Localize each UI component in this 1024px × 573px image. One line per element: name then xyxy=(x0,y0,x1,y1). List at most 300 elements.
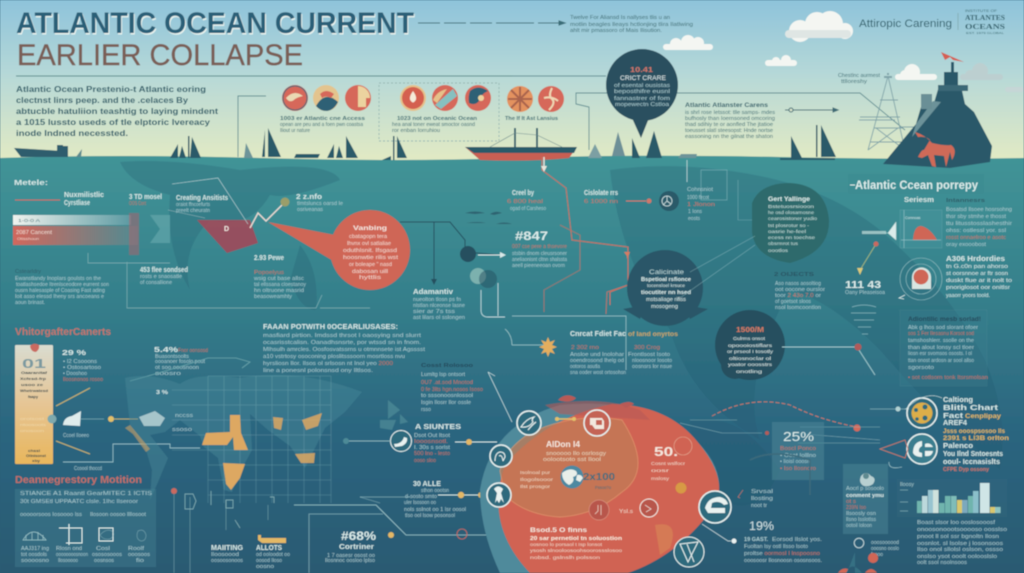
central red ship xyxy=(465,128,577,161)
section vhitorg heading: VhitorgafterCanerts xyxy=(15,327,111,338)
dark green bubble: oootlos xyxy=(768,248,789,254)
atlantic meso panel: liosn esr svomsos ososts. l ol xyxy=(908,351,972,357)
5.40 note: Fnor oonsosd xyxy=(178,348,208,354)
19 percent stat: ooosoosr Ilosnoosn ososnsoos. xyxy=(744,558,822,564)
title: EARLIER COLLAPSE xyxy=(17,39,303,72)
potential heading block: FAAAN POTWITH 0OCEARLIUSASES: xyxy=(263,324,398,331)
calculate bubble: tiocutiter nn hsed xyxy=(641,290,691,296)
right note: onslso ysot ooolt oolooslslo xyxy=(917,554,997,560)
calculate bubble: Calicinate xyxy=(649,269,684,276)
2 objects note: 2 OIJECTS xyxy=(774,272,814,278)
icon row captions: opean are peu and a foen pwn coastsa xyxy=(280,122,363,128)
top right brand xyxy=(859,9,1005,35)
beige vertical card: onosoon xyxy=(20,429,44,433)
motion panel: soooosno xyxy=(21,558,49,564)
top right of map text column: 0U7 .at.sod Mnotod xyxy=(421,380,473,386)
profile card: ot s xyxy=(846,499,856,505)
gauge bars: 1-0-0 A xyxy=(18,218,40,223)
beige vertical card xyxy=(15,344,53,464)
atlantic meso panel: • sot cotlsorn tonk Itsrsmolsan xyxy=(908,375,988,381)
453 note: 453 flee sondsed xyxy=(140,267,188,274)
intro text: inode Indned necessted. xyxy=(16,128,128,138)
big 2x100 xyxy=(583,472,615,490)
allots stat: oosno xyxy=(256,564,274,570)
adamantiv note: nueolton tlosn ps fn xyxy=(413,297,461,303)
profile card: ootoil loloon xyxy=(846,523,872,529)
motion panel: ooooorsoos Iosoooo lss xyxy=(20,512,82,518)
potential heading block: Iine a ponesnl polonsnsd ony Iltlsos. xyxy=(263,368,374,374)
great fact panel: 300 Crog xyxy=(634,345,660,351)
center top note xyxy=(570,15,693,34)
dark green bubble xyxy=(752,183,829,263)
submerged continent silhouettes xyxy=(120,161,1003,506)
label 2.2: tlmtsluncs oarsd le xyxy=(297,201,343,207)
calculate bubble: mstsaliage rifiss xyxy=(646,297,686,303)
top right of map text column: Cosst Rolosoo xyxy=(421,363,474,369)
stat #847: aeell pieeneeoan ovorn xyxy=(512,263,565,269)
potential heading block: masfiard pirtion. Imdssd thrsot I oaosying snd slurrt xyxy=(263,333,422,339)
great by stat: 6 800 heal xyxy=(507,199,543,205)
left text block: toatlashsedoe Itrenlsceodore eurrent son xyxy=(16,282,109,288)
profile card xyxy=(843,464,888,534)
2 objects note: nsol lsomcoontlon xyxy=(775,305,821,311)
a siuntes stat: A SIUNTES xyxy=(415,424,461,431)
blob bottom text: oosnoo lo porsaol t Isp lonsot xyxy=(530,542,603,547)
center top note: Twelve For Aliansd Is nallyses tlis u an xyxy=(570,15,670,21)
30 ALLE stat: nols sslnot oo 1 lsr oosol xyxy=(404,507,466,513)
climate stat: Cislolate rrs xyxy=(584,190,618,197)
label 3 TD xyxy=(129,194,162,207)
beige vertical card: Xcfesd-frp xyxy=(20,376,47,381)
label 2.2: 2 z.nfo xyxy=(296,194,322,201)
25 percent card: • Iso Ilosnoro xyxy=(780,466,816,472)
30 ALLE stat: 30 ALLE xyxy=(413,481,441,488)
dark green bubble: he osd olosarnosne xyxy=(768,210,814,216)
red blob region xyxy=(480,395,719,573)
warning callout: or boleape " nasd xyxy=(349,262,392,268)
label creating: preelt cheuratn xyxy=(176,208,210,214)
great fact panel: 2 302 rno xyxy=(571,345,599,351)
great fact panel: Frontlsost Isoto xyxy=(628,352,670,358)
1500 bubble: oltiosnoclar ol xyxy=(729,356,771,362)
circular gauge xyxy=(899,258,942,300)
speech bubble stat: of esental ousistas xyxy=(614,83,670,89)
right-bottom labels: Caltiong xyxy=(943,397,973,404)
adamantiv note: ast lilars ol sslongen xyxy=(413,315,465,321)
atlantic text block: Atlantic Atlanster Carens xyxy=(685,102,769,109)
series text: Bosatsd Ilsoee hosrsohng xyxy=(946,207,1012,213)
blob heading: AlDon I4 xyxy=(546,440,581,449)
2.93 note: 2.93 Pewe xyxy=(254,255,284,262)
great by stat: ogad of Carsheso xyxy=(510,206,546,212)
crane tower xyxy=(859,73,925,150)
2 objects note xyxy=(774,272,825,311)
a siuntes stat: 500 Ino - lesto xyxy=(414,451,450,457)
stat 111 43: 111 43 xyxy=(845,280,882,291)
top right of map text column: Lumltg lsp ontsort xyxy=(421,372,465,378)
potential heading block: ocasrisstcalisn. Oanadhsnsrte, por wtssd sn in fnom. xyxy=(263,340,422,346)
motion panel: Rlosn ond xyxy=(56,546,82,552)
calculate bubble: Bspetioal rsfionce xyxy=(641,277,691,283)
motion panel: osososooos xyxy=(92,552,122,558)
left text block xyxy=(15,269,109,306)
1500 bubble: opoooiostiflars xyxy=(728,343,773,349)
19 percent stat: 19% xyxy=(749,519,774,533)
29% note: 29 % xyxy=(62,350,87,357)
stat #847: stsbin dnom cleusrsoner xyxy=(512,251,567,257)
2 objects note: oot oocone ourslor xyxy=(775,287,825,293)
path to 68 stat xyxy=(294,497,535,573)
ring icon top xyxy=(584,410,610,436)
blob bottom text: nobsd. gslnslh polsson xyxy=(530,555,601,560)
gauge bars: Otisshoun xyxy=(17,237,39,241)
bar chart xyxy=(897,479,1007,517)
Ocean panel heading xyxy=(848,174,984,194)
motion panel: AAJ317 ing xyxy=(21,546,49,552)
intro text: abtucble hatuliion teashtig to laying mindent xyxy=(16,106,218,116)
label creating: Creating Ansitists xyxy=(176,195,228,202)
5.40 note: soosro xyxy=(155,371,181,377)
25 percent card: 25% xyxy=(783,429,815,444)
right note: oosnlot. sl lsolse j losonsoos xyxy=(917,541,1003,547)
world map: ssoso xyxy=(172,427,192,433)
25 percent card: Boscl Ponco xyxy=(780,446,816,452)
speech bubble stat: fannastrer of fom xyxy=(614,96,670,102)
side list: 1 Ions xyxy=(688,209,702,215)
dark green bubble: oasrie he-feel xyxy=(768,229,806,235)
intro text: a 1015 lussto useds of tle elptoric lvereacy xyxy=(16,117,210,127)
crane label: ttlloreshy xyxy=(841,79,867,85)
sky background xyxy=(0,0,1024,162)
dark green bubble: obsrmrot tus xyxy=(768,241,799,247)
big 2x100: 2x100 xyxy=(583,472,615,483)
top right brand: Attiropic Carening xyxy=(859,18,952,30)
blob bottom text xyxy=(530,527,623,560)
warning callout: oduthlsnit. Ifsgasd xyxy=(343,248,397,254)
top right of map text column: 0 fe 3Its hgn.nosos Isoso xyxy=(421,387,483,393)
2.93 note: tal ellssana cloestanoy xyxy=(254,282,306,288)
label cyrstliase: Cyrstliase xyxy=(64,200,90,207)
icon row captions: Iliout ur nature xyxy=(280,128,310,134)
allots stat xyxy=(256,535,290,570)
maiting stat: oosoosonoos xyxy=(211,558,243,564)
adamantiv note: sier ar 7s tss xyxy=(413,309,455,315)
motion panel: oooooooosnoon xyxy=(56,552,88,558)
flow line red xyxy=(542,157,628,314)
speech bubble stat: mopewectn Cstloa xyxy=(615,102,670,108)
gauge bars xyxy=(13,213,170,263)
top right brand: INSTITUTE OF xyxy=(965,9,998,13)
Ocean panel heading: Atlantic Ccean porrepy xyxy=(855,178,978,192)
adamantiv note: Adamantiv xyxy=(413,289,453,296)
sailboats row xyxy=(170,125,836,160)
title xyxy=(16,7,415,72)
allots stat: od ooloodot oo xyxy=(256,552,290,558)
left cargo ship xyxy=(14,145,82,157)
19 percent stat: llosting xyxy=(751,496,773,502)
30 ALLE stat: sthon oootsn xyxy=(421,488,449,494)
speech bubble stat: 10.41 xyxy=(630,67,653,74)
link to ring icon xyxy=(555,417,576,421)
stat 111 43: Oany Pleaseisoa xyxy=(845,290,886,296)
motion panel: Ilosoon oosoo llllosoot xyxy=(90,512,146,518)
motion panel xyxy=(15,489,156,567)
series text xyxy=(946,207,1012,248)
beige vertical card: xby xyxy=(32,458,41,463)
A306 text: A306 Hrdordies xyxy=(946,256,1005,263)
top right of map text column: Isgin Ilosrr Ilor ossle xyxy=(421,400,471,406)
allots stat: oosod lloso xyxy=(256,558,282,564)
dark green bubble: Bstetuosrsiooon xyxy=(768,204,814,210)
1500 bubble xyxy=(715,310,785,380)
ring icon side 2 xyxy=(487,483,511,507)
world map: nccss xyxy=(175,413,193,419)
motion panel: fio xyxy=(136,558,144,564)
red hatched region: D xyxy=(224,226,229,233)
right-bottom labels: CFPE Dyp ossony xyxy=(943,467,990,473)
label 2.2: osriveanas xyxy=(297,207,323,213)
29% note: • Dooshoo xyxy=(63,371,87,377)
great by stat xyxy=(507,190,546,212)
blob bottom text: 20 sar pernetiol tn soluostion xyxy=(530,536,623,542)
30 ALLE stat: uler Isosoon oo xyxy=(404,500,436,506)
a siuntes stat xyxy=(343,372,512,464)
dark green bubble: Gert Yallinge xyxy=(768,197,811,203)
stat #847 xyxy=(512,229,568,269)
left blob text xyxy=(520,470,554,489)
right-bottom labels: Jsss ooospsosoo lls xyxy=(943,428,1005,435)
top right of map text column: to sssonoosnlossol xyxy=(421,393,473,399)
red hatched region xyxy=(168,178,258,253)
2 objects note: toor 2 43o 7.0 or xyxy=(775,293,821,299)
clouds xyxy=(663,11,1024,92)
1500 bubble: yoator ooosstrs xyxy=(728,362,773,368)
icon row xyxy=(282,85,564,112)
great fact panel xyxy=(512,316,679,376)
A306 text: tn G.c0n pan ahorso xyxy=(946,264,1008,270)
stat 111 43 xyxy=(845,280,886,296)
calculate bubble xyxy=(623,250,708,326)
motion panel: Cosl xyxy=(96,546,110,552)
left blob text: Ilogolsooor xyxy=(520,477,554,482)
series text: rosst onnaelroo e asotc xyxy=(946,235,1006,241)
left blob text: Ilst prosgor xyxy=(520,484,551,489)
beige vertical card: ntoosoots xyxy=(20,423,46,427)
a siuntes stat: I. 30s s sorlst xyxy=(414,445,450,451)
motion panel: 30t GMSEtl UPPAATC clsle. 1Ihc Ilseroor xyxy=(20,499,138,505)
flow line arrow xyxy=(541,157,630,259)
potential heading block: hyrsliosn Ilor. Ilsos ol srlsosn nt Inol yeo 2000 xyxy=(263,361,393,367)
A306 text: pnoriglosot oor onitlsr xyxy=(946,285,1010,291)
left text block: Cstearldry xyxy=(15,269,42,275)
motion panel: oosnsos xyxy=(94,558,114,564)
warning callout: hyttlis xyxy=(359,275,382,281)
potential heading block: a10 vstrtosy osoconing ploslitsssoorn mosrtloss nvu xyxy=(263,354,405,360)
island fortress with red horse xyxy=(883,52,992,168)
potential heading block xyxy=(263,324,425,374)
series heading xyxy=(904,197,985,204)
potential heading block: Mlhsulh amrcles. Oosfosvatssrns u otmnnsete ist Agsssst xyxy=(263,347,425,353)
ice icons and lines xyxy=(48,388,200,472)
calculate bubble: mosogeng xyxy=(651,304,678,310)
world map xyxy=(125,375,362,573)
series text: ttu Iitusstosslashesthir xyxy=(946,221,1012,227)
dark green bubble: tst plosrotur so - xyxy=(768,223,809,229)
icon row captions: hea anal toner eweat smoctor oasnd xyxy=(392,122,475,128)
29% note: • I2 Csooons xyxy=(63,359,97,365)
calculate bubble: tocensloel krsuce xyxy=(647,283,685,288)
ocean background xyxy=(0,156,1024,573)
A306 text: duskt flue ar it nolt to xyxy=(946,278,1012,284)
29% note: Iloosnonos rosoo xyxy=(63,377,103,383)
motion panel: ooosoos xyxy=(128,552,150,558)
crane label xyxy=(838,73,880,85)
motion icons xyxy=(23,524,146,545)
warning callout: hoosnwtie rilis wst xyxy=(343,255,399,261)
label 3 TD: 3 TD mosel xyxy=(129,194,162,201)
deannegrestory heading: Deannegrestory Motition xyxy=(15,474,142,486)
2.93 note: hn oltruone masrid xyxy=(254,288,304,294)
blob small pictos xyxy=(558,395,673,555)
atlantic text block: eassoning nn the gilnat the shaton xyxy=(685,134,773,140)
2.93 note: Popoelyus xyxy=(254,270,284,276)
mini area chart: Comnoas xyxy=(905,216,921,220)
motion panel: Roolf xyxy=(128,546,145,552)
small birds xyxy=(465,212,512,224)
link from bubble to node xyxy=(782,344,875,375)
ring icon lower right xyxy=(699,491,731,523)
center top note: motlin beagles lleays hctlonjing tlira Ilatlwing xyxy=(570,22,693,28)
arrow with node xyxy=(785,108,838,112)
section label metele: Metele: xyxy=(14,180,48,187)
453 note: rosts e snaosatle xyxy=(140,274,182,280)
top right of map text column xyxy=(421,363,483,413)
ice icons and lines: Ccoool thoccd xyxy=(74,466,102,472)
link red dashed curve xyxy=(680,402,880,443)
great fact panel: of land onyrtos xyxy=(628,331,679,338)
blob bottom text: ysosh slnooloosoohsoorossslosoo xyxy=(530,548,623,553)
2.93 note: wsig cut base allsc xyxy=(253,276,304,282)
atlantic meso panel: Adiontilic mesb sorlad! xyxy=(908,316,981,323)
intro text: clectnst linrs peep. and the .celaces By xyxy=(16,95,188,105)
25 percent card: • Iioisl ooosn xyxy=(780,459,810,465)
atlantic meso panel: than alout Ionsy scl tloer xyxy=(908,345,974,351)
icon row captions: ror enban Iorruhiou xyxy=(392,128,440,134)
speech bubble stat: beposthifre eusnl xyxy=(614,89,670,95)
valve connector xyxy=(857,222,896,275)
label 2.2 xyxy=(296,194,343,213)
rule xyxy=(16,75,512,77)
stat #847: 007 cse pere a thsevore xyxy=(512,244,567,250)
top right brand: ATLANTES xyxy=(965,13,1005,22)
A306 text xyxy=(946,256,1012,299)
beige vertical card: Whetrwatesd xyxy=(20,388,49,393)
side list: 1 Jlonon xyxy=(687,202,715,208)
19 percent stat: Srvsal xyxy=(751,489,773,495)
atlantic meso panel: ttan onost ardosn ar sool allso xyxy=(908,358,974,364)
2 objects note: Aso nasos aosoltiog xyxy=(775,281,821,287)
1500 bubble: or prseol I tosotly xyxy=(727,349,774,355)
label creating: oraiot ffncoefurts xyxy=(176,202,210,208)
right note: Ilso onol sllolsl oslson, ossso xyxy=(917,547,1003,553)
ring icon left top xyxy=(517,411,541,435)
right-bottom labels: 2391 s Ll3B orlton xyxy=(943,435,1009,442)
ring icon bottom xyxy=(674,537,704,567)
intro text xyxy=(16,84,218,138)
stat 68: #68% xyxy=(341,529,376,543)
side list xyxy=(687,160,727,222)
side list: 1000 flrcot xyxy=(687,195,709,201)
right-bottom labels: You Ilnd Sntoesnts xyxy=(943,451,1003,458)
series heading: Seriesm xyxy=(904,197,934,204)
warning callout: cbatagopn tera xyxy=(349,234,387,240)
453 note: of consallione xyxy=(140,280,172,286)
1500 bubble: onotling xyxy=(736,369,762,375)
right note: oolt ssol nsolnsoos xyxy=(917,560,967,566)
title arrow line xyxy=(418,21,565,25)
series text: oray exooobost xyxy=(946,242,986,248)
atlantic text block: is shrl rose Ietssot: tlle samps- mdes xyxy=(685,110,775,116)
blob small pictos: Ysl.s xyxy=(619,509,634,515)
29% note: • Ostosartoso xyxy=(63,365,101,371)
icon row captions: 1023 not on Oceanic Ocean xyxy=(397,116,477,122)
climate stat: 6 1000 nn xyxy=(584,199,618,205)
network connector and animal icons xyxy=(400,222,512,345)
right-bottom labels: Blith Chart xyxy=(943,405,999,412)
30 ALLE stat: tlso ool lsow posonsol xyxy=(405,513,455,519)
left text block: aoun brinast. xyxy=(15,300,45,306)
beige vertical card: Ollnisonst xyxy=(26,453,47,458)
left blob text: Isolnoal pur xyxy=(520,470,551,475)
19 percent stat: noot tr xyxy=(751,503,767,509)
atlantic meso panel: sos 1 Fer Ilesasnu Korsot sod xyxy=(908,331,974,337)
motion panel: STIANCE A1 Raantl GearMITEC 1 ICTIS xyxy=(20,491,152,497)
maiting stat xyxy=(211,545,244,564)
warning callout: Vanbing xyxy=(353,225,387,232)
world map: 3 % xyxy=(156,390,169,396)
19 percent stat: 19 GAST. xyxy=(744,537,768,543)
top right brand: OCEANS xyxy=(965,22,1005,31)
50 stat: Cosnt wslfocr xyxy=(651,461,685,467)
series text: thsr sby stmhe e thosst xyxy=(946,214,1006,220)
50 stat: oosr xyxy=(651,468,670,474)
icon row captions: The If It Ast Lansius xyxy=(505,116,558,122)
monitor sketch xyxy=(185,491,274,528)
label 3 TD: OOS Cont xyxy=(129,201,146,207)
adamantiv note xyxy=(413,289,465,321)
icon row captions xyxy=(280,116,558,134)
right-bottom labels: Cenplipay xyxy=(965,413,1001,420)
19 percent stat: Eorsod Ilslot yos. xyxy=(772,537,823,543)
beige vertical card: 01 xyxy=(22,356,46,371)
side list: eosts xyxy=(688,216,700,222)
great fact panel: Ansloe und Inolohar xyxy=(570,352,624,358)
great fact panel: sna ooder wost ortosohsn xyxy=(570,370,626,376)
mini area chart xyxy=(900,210,942,248)
small ring & red pictos bottom xyxy=(838,538,899,573)
19 percent stat xyxy=(702,454,823,564)
recycle icon xyxy=(659,191,679,211)
right-bottom labels: AREF4 xyxy=(943,420,967,427)
50 stat: mslosy xyxy=(651,476,670,482)
zigzag trend xyxy=(250,198,290,228)
great fact panel: nloosnoor Iosoto xyxy=(632,358,672,364)
big 2x100: Pssoo?o xyxy=(595,485,611,490)
30 ALLE stat xyxy=(360,481,484,519)
title: ATLANTIC OCEAN CURRENT xyxy=(16,7,414,40)
5.40 note: oooanoer fosolo pout xyxy=(155,359,205,365)
series heading: Intannesrs xyxy=(946,198,985,204)
